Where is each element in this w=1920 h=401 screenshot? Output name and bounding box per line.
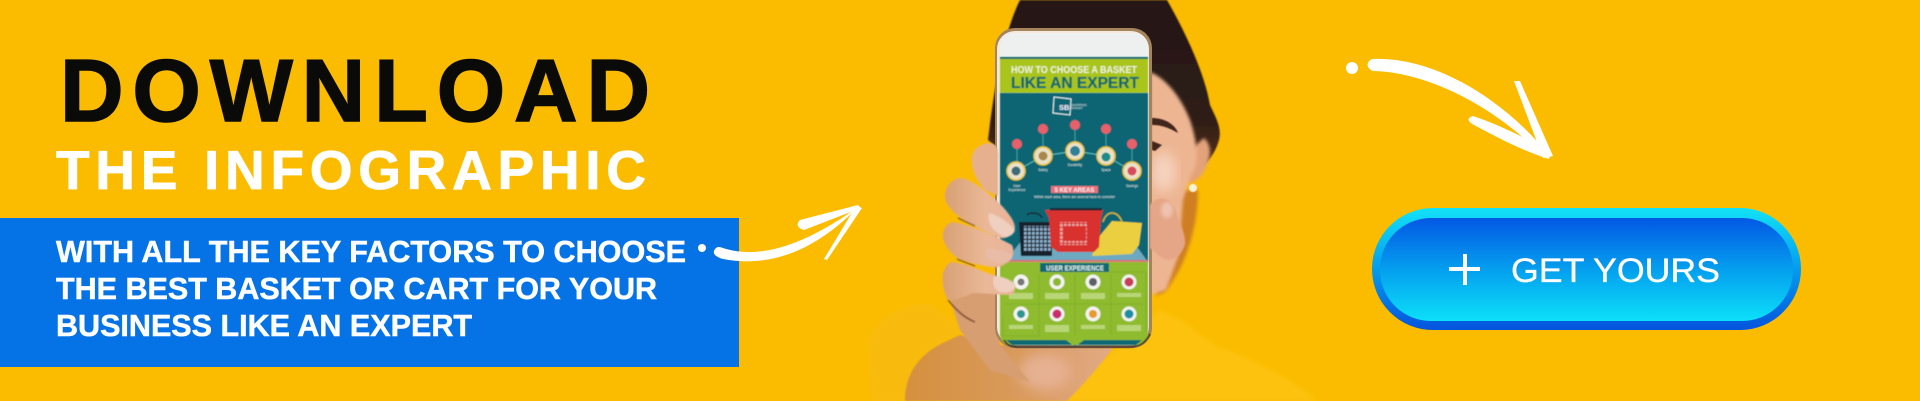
face and neck (1150, 72, 1197, 295)
phone screen top (1000, 33, 1148, 57)
infographic header: HOW TO CHOOSE A BASKET (1011, 64, 1137, 76)
get yours button (1372, 208, 1801, 330)
earring (1189, 184, 1197, 192)
ring finger (943, 222, 1013, 267)
thumb highlight (1161, 202, 1173, 218)
five key area timeline: Safety (1038, 168, 1048, 172)
phone (995, 28, 1152, 348)
infographic header (1000, 57, 1148, 93)
infographic teal panel (1000, 93, 1148, 262)
callout text: WITH ALL THE KEY FACTORS TO CHOOSE (56, 234, 686, 269)
logo (1053, 97, 1088, 115)
user experience panel (1000, 260, 1150, 347)
hair behind neck (1155, 190, 1198, 296)
three baskets (1005, 208, 1148, 262)
index finger (972, 143, 998, 196)
woman (868, 0, 1318, 401)
back of hand (948, 280, 1030, 382)
callout text (56, 234, 686, 343)
fingernails (989, 213, 1015, 237)
arrow: to button (1346, 59, 1553, 159)
five key area timeline: Experience (1009, 188, 1026, 192)
subtitle: the infographic: THE INFOGRAPHIC (56, 139, 646, 201)
five key area timeline: Savings (1126, 184, 1138, 188)
five key area timeline (1007, 120, 1141, 192)
title: download: DOWNLOAD (60, 41, 650, 140)
icon: plus (1449, 254, 1480, 285)
blue callout panel (0, 218, 739, 367)
arrow: from callout to phone (698, 205, 862, 261)
five key area timeline: Durability (1068, 163, 1082, 167)
callout text: THE BEST BASKET OR CART FOR YOUR (56, 271, 657, 306)
shirt (1060, 310, 1318, 401)
forearm (905, 335, 1113, 401)
five key area timeline: Space (1101, 168, 1111, 172)
shirt sleeve (868, 304, 965, 401)
phone body (995, 28, 1152, 348)
5 key areas label (1034, 186, 1116, 199)
logo: SHOPPING (1071, 103, 1088, 107)
5 key areas label: Within each area, there are several facts to consider (1034, 195, 1116, 199)
thumb (1150, 199, 1185, 260)
infographic header: LIKE AN EXPERT (1011, 75, 1139, 92)
finger crease shadows (948, 218, 975, 322)
hand fingers over phone (943, 143, 1185, 322)
user experience panel: USER EXPERIENCE (1046, 264, 1104, 272)
hair (988, 0, 1220, 170)
ear (1188, 138, 1210, 183)
eyebrow and eye (1152, 118, 1178, 151)
cheek highlight (1152, 152, 1176, 192)
logo: SB (1059, 103, 1070, 112)
logo: BASKET (1071, 106, 1083, 110)
callout text: BUSINESS LIKE AN EXPERT (56, 308, 472, 343)
button label: GET YOURS (1511, 252, 1720, 290)
little finger (943, 262, 1015, 300)
palm highlight (1019, 354, 1071, 390)
middle finger (945, 178, 1015, 238)
five key area timeline: User (1013, 184, 1021, 188)
5 key areas label: 5 KEY AREAS (1055, 188, 1094, 194)
